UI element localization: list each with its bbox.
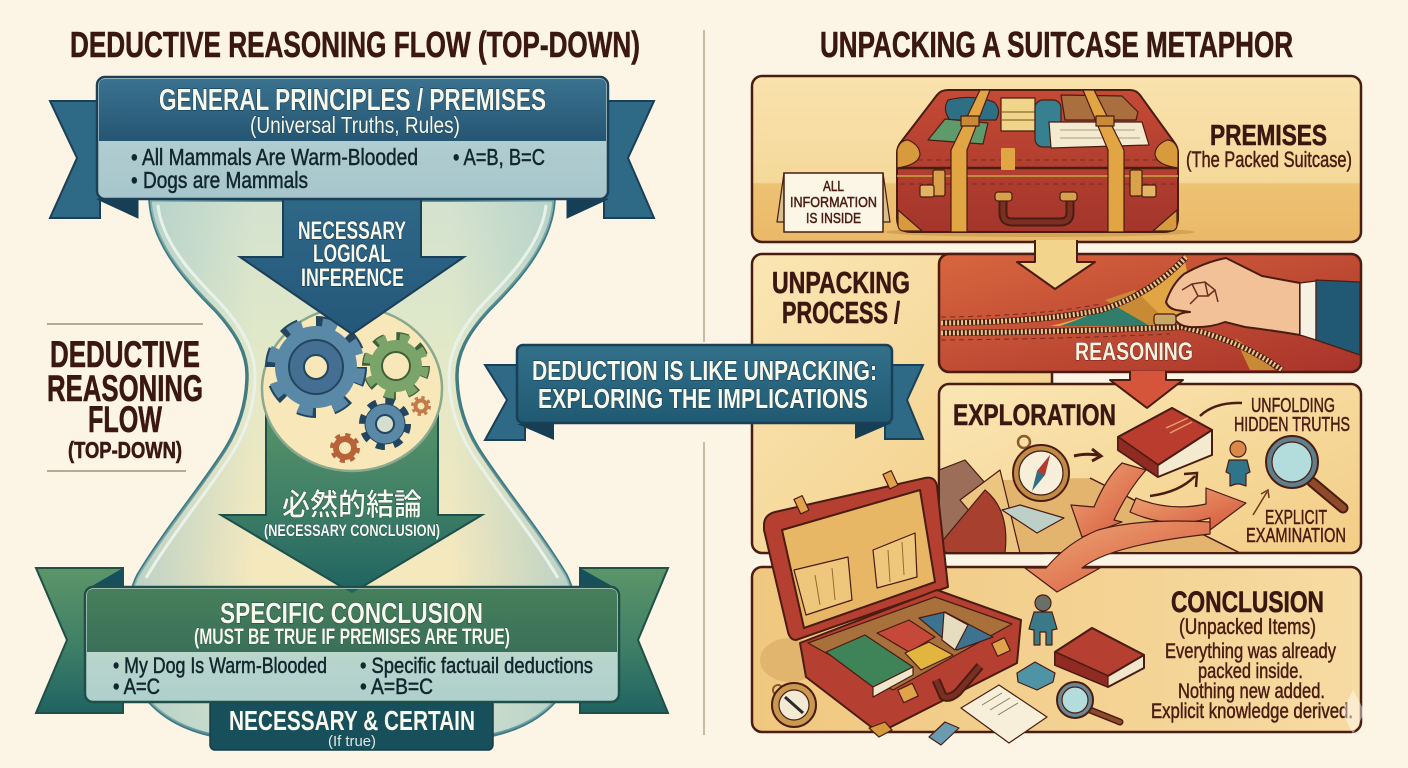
sign: all information is inside: IS INSIDE: [806, 210, 861, 227]
caption: the packed suitcase: (The Packed Suitcase): [1186, 147, 1352, 172]
side label: deductive reasoning flow: (TOP-DOWN): [68, 437, 182, 463]
icon: small box: [1017, 662, 1055, 690]
icon: eraser: [929, 722, 959, 745]
arrow: necessary logical inference: [240, 197, 464, 334]
arrow: exploration to conclusion: [1025, 521, 1210, 592]
icon: open suitcase: [760, 471, 1021, 737]
panel: unpacking process: PROCESS /: [782, 295, 900, 330]
label: unfolding hidden truths: [1234, 395, 1350, 436]
label: reasoning: REASONING: [1075, 338, 1193, 366]
callout: deduction is like unpacking: EXPLORING THE IMPLICATIONS: [538, 383, 868, 414]
arrow: curved to label: [1200, 403, 1242, 416]
arrow: compass to book: [1074, 449, 1101, 461]
side label: deductive reasoning flow: FLOW: [88, 399, 162, 440]
arrow: necessary logical inference: LOGICAL: [313, 240, 391, 268]
arrow: reasoning to exploration: [1110, 371, 1183, 408]
panel: necessary and certain: [210, 700, 493, 750]
sign: all information is inside: ALL: [823, 178, 844, 195]
side label: deductive reasoning flow: DEDUCTIVE: [50, 334, 200, 375]
icon: orange gears: [333, 398, 429, 460]
icon: red book: [1055, 628, 1144, 687]
conclusion notes: packed inside.: [1198, 660, 1303, 683]
icon: packed suitcase: [885, 90, 1195, 237]
icon: small blue gear: [363, 402, 407, 446]
panel: unpacking process: [752, 254, 1052, 553]
panel: premises: [752, 76, 1361, 242]
arrow: curved upward: [1150, 473, 1197, 496]
icon: small map: [1002, 505, 1064, 533]
conclusion bullet list: • My Dog Is Warm-Blooded: [113, 653, 327, 678]
icon: letter: [961, 685, 1047, 743]
hourglass container: [128, 200, 576, 735]
watermark: [1342, 690, 1365, 734]
subheading: must be true: (MUST BE TRUE IF PREMISES ARE TRUE): [194, 624, 510, 649]
panel: reasoning: [939, 254, 1361, 372]
conclusion bullet list: • A=B=C: [360, 674, 433, 699]
arrow: small up to examination: [1253, 490, 1269, 515]
conclusion bullet list: • Specific factuail deductions: [360, 653, 593, 678]
panel: necessary and certain: NECESSARY & CERTAIN: [229, 705, 475, 736]
ribbon: specific conclusion: [36, 568, 668, 713]
premises bullet list: • All Mammals Are Warm-Blooded: [131, 144, 418, 170]
icon: small figure: [1029, 595, 1057, 645]
panel: specific conclusion: [85, 587, 619, 702]
panel: general principles: [97, 77, 608, 199]
suitcase base: [800, 590, 1021, 733]
icon: small figure: [1226, 441, 1250, 486]
heading: conclusion: CONCLUSION: [1171, 586, 1324, 619]
sign: all information is inside: [777, 173, 890, 232]
conclusion bullet list: • A=C: [113, 674, 160, 699]
premises bullet list: [131, 144, 545, 193]
arrow: necessary logical inference: NECESSARY: [298, 217, 406, 245]
terrain: [939, 460, 1240, 553]
conclusion notes: Explicit knowledge derived.: [1151, 700, 1353, 723]
conclusion notes: [1151, 640, 1353, 723]
suitcase lid: [764, 478, 948, 640]
open zipper interior: [1050, 262, 1200, 330]
icon: compass: [772, 683, 816, 727]
icon: big blue gear: [272, 323, 360, 411]
heading: general principles: GENERAL PRINCIPLES / PREMISES: [159, 82, 546, 117]
zipper teeth: [941, 257, 1186, 323]
icon: compass: [1013, 436, 1069, 501]
label: explicit examination: EXPLICIT: [1265, 507, 1327, 529]
arrow: necessary logical inference: INFERENCE: [301, 264, 404, 292]
conclusion notes: Nothing new added.: [1178, 680, 1325, 703]
arrow: premises to unpacking: [1017, 240, 1095, 289]
heading: exploration: EXPLORATION: [953, 399, 1116, 432]
heading: specific conclusion: SPECIFIC CONCLUSION: [220, 598, 483, 630]
arrow subtitle: necessary conclusion: (NECESSARY CONCLUSION): [264, 521, 440, 540]
arrow: orange swirl right: [1130, 488, 1246, 530]
arrow: orange swirl from book: [1071, 463, 1146, 537]
label: explicit examination: EXAMINATION: [1246, 525, 1346, 547]
premises bullet list: • Dogs are Mammals: [131, 167, 308, 193]
ribbon: general principles: [50, 101, 654, 218]
icon: red book: [1118, 408, 1212, 477]
subheading: universal truths: (Universal Truths, Rules): [250, 112, 460, 138]
arrow: necessary conclusion: [221, 400, 482, 593]
gears circle: [262, 307, 442, 471]
panel: unpacking process: UNPACKING: [772, 265, 910, 300]
sign: all information is inside: INFORMATION: [790, 194, 877, 211]
suitcase handle: [936, 666, 980, 697]
panel: conclusion: [752, 471, 1361, 745]
label: unfolding hidden truths: UNFOLDING: [1251, 395, 1335, 417]
premises bullet list: • A=B, B=C: [453, 144, 545, 170]
conclusion bullet list: [113, 653, 593, 699]
icon: green gear: [367, 337, 425, 395]
left column title: DEDUCTIVE REASONING FLOW (TOP-DOWN): [70, 24, 640, 65]
label: unfolding hidden truths: HIDDEN TRUTHS: [1234, 414, 1350, 436]
panel: exploration: [939, 384, 1361, 553]
callout: deduction is like unpacking: DEDUCTION IS LIKE UNPACKING:: [532, 355, 877, 386]
icon: magnifying glass: [1266, 436, 1343, 508]
icon: hand and sleeve: [1154, 258, 1360, 355]
ribbon: deduction is like unpacking: [485, 365, 923, 440]
conclusion arrow text: 必然的結論: [282, 480, 422, 524]
side label: deductive reasoning flow: [47, 324, 203, 471]
side label: deductive reasoning flow: REASONING: [47, 368, 203, 409]
label: explicit examination: [1246, 507, 1346, 547]
caption: unpacked items: (Unpacked Items): [1179, 614, 1316, 639]
icon: magnifying glass: [1057, 682, 1120, 722]
conclusion notes: Everything was already: [1165, 640, 1336, 663]
heading: premises: PREMISES: [1210, 120, 1327, 152]
callout: deduction is like unpacking: [517, 345, 892, 423]
panel: necessary and certain: (If true): [328, 733, 376, 750]
